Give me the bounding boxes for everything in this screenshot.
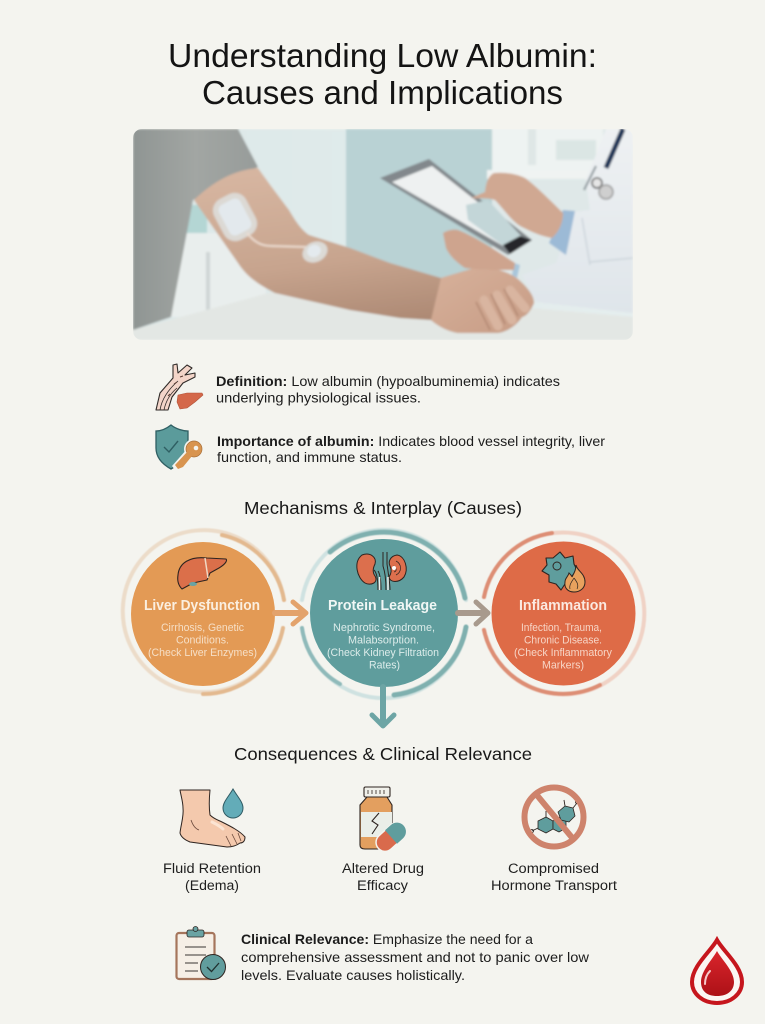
photo: clinician reviewing tablet beside a patient's arm with sensor	[133, 129, 633, 340]
icon: clipboard with check	[176, 926, 226, 980]
liver details: Conditions.	[176, 634, 229, 646]
icon: water drop	[223, 789, 243, 818]
protein heading: Protein Leakage	[328, 598, 437, 614]
inflammation details	[514, 622, 613, 672]
info row: definition	[156, 364, 560, 410]
title	[168, 37, 597, 111]
hormone label: Hormone Transport	[491, 878, 617, 894]
icon: kidneys	[357, 552, 406, 590]
clinical relevance text: comprehensive assessment and not to panic over low	[241, 950, 589, 965]
altered drug label: Altered Drug	[342, 861, 424, 877]
definition text line two: underlying physiological issues.	[216, 390, 421, 406]
protein details: Rates)	[369, 660, 400, 672]
info row: importance of albumin	[156, 425, 605, 470]
inflammation details: Markers)	[542, 660, 584, 672]
panel: liver dysfunction	[123, 530, 284, 694]
clinical relevance text: Clinical Relevance: Emphasize the need for a	[241, 932, 533, 947]
title: Causes and Implications	[202, 74, 563, 111]
definition text: Definition: Low albumin (hypoalbuminemia) indicates	[216, 374, 560, 389]
title: Understanding Low Albumin:	[168, 37, 597, 74]
fluid retention label: (Edema)	[185, 878, 239, 894]
icon: red blood drop logo	[692, 940, 742, 1003]
altered drug label	[342, 861, 424, 894]
hormone label: Compromised	[508, 861, 599, 877]
protein details: Nephrotic Syndrome,	[333, 622, 435, 634]
inflammation details: (Check Inflammatory	[514, 647, 613, 659]
protein details: Malabsorption.	[348, 634, 419, 646]
icon: medicine bottle	[360, 787, 392, 849]
icon: swollen foot	[180, 790, 245, 847]
icon: cell and flame	[542, 552, 585, 592]
consequence: fluid retention	[163, 789, 261, 894]
clinical relevance text	[241, 932, 589, 983]
icon: liver	[178, 558, 227, 589]
protein details	[327, 622, 439, 672]
consequence: altered drug efficacy	[342, 787, 424, 894]
panel: inflammation	[484, 532, 644, 694]
arrow: down to consequences	[372, 687, 394, 726]
liver ring	[123, 530, 284, 694]
icon: capsule	[372, 819, 410, 855]
inflammation details: Infection, Trauma,	[521, 622, 602, 634]
importance text: Importance of albumin: Indicates blood vessel integrity, liver	[217, 434, 605, 449]
protein ring	[302, 530, 466, 698]
clinical relevance text: levels. Evaluate causes holistically.	[241, 968, 465, 983]
icon: shield and key	[156, 425, 204, 470]
consequence: compromised hormone transport	[491, 788, 617, 894]
heading: mechanisms: Mechanisms & Interplay (Causes)	[244, 498, 522, 518]
liver details: Cirrhosis, Genetic	[161, 622, 245, 634]
inflammation heading: Inflammation	[519, 598, 607, 614]
liver details: (Check Liver Enzymes)	[148, 647, 257, 659]
icon: molecule in prohibition sign	[524, 788, 584, 846]
heading: consequences: Consequences & Clinical Relevance	[234, 744, 532, 764]
liver disc	[131, 542, 275, 686]
inflammation ring	[484, 532, 644, 694]
panel: protein leakage	[302, 530, 466, 698]
importance text line two: function, and immune status.	[217, 450, 402, 465]
fluid retention label	[163, 861, 261, 894]
protein disc	[310, 539, 458, 687]
callout: clinical relevance	[176, 926, 589, 983]
liver heading: Liver Dysfunction	[144, 598, 260, 614]
arrow: liver to protein leakage	[275, 602, 306, 624]
protein details: (Check Kidney Filtration	[327, 647, 439, 659]
altered drug label: Efficacy	[357, 878, 409, 894]
icon: blood vessel and liver	[156, 364, 203, 410]
inflammation disc	[492, 542, 636, 686]
liver details	[148, 622, 257, 659]
arrow: protein leakage to inflammation	[458, 602, 488, 624]
hormone label	[491, 861, 617, 894]
inflammation details: Chronic Disease.	[524, 634, 602, 646]
fluid retention label: Fluid Retention	[163, 861, 261, 877]
